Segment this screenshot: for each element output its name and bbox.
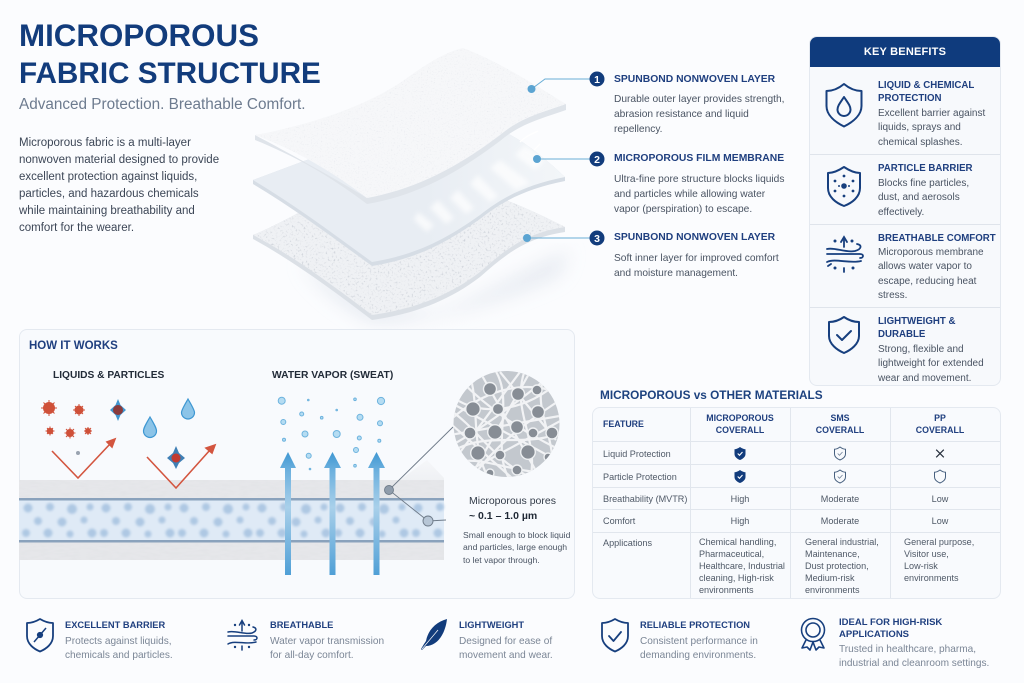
intro paragraph — [19, 137, 219, 234]
cross: PP liquid — [936, 450, 944, 457]
reflected arrow left — [52, 439, 115, 478]
microporous applications: Healthcare, Industrial — [699, 561, 785, 571]
how it works heading: HOW IT WORKS — [29, 340, 118, 352]
text: SMS — [830, 413, 850, 423]
number badge 1: 1 — [594, 74, 600, 86]
SMS applications: Medium-risk — [805, 573, 855, 583]
PP applications: General purpose, — [904, 537, 974, 547]
particles — [41, 399, 185, 469]
PP applications: Low-risk — [904, 561, 938, 571]
vapor arrows — [280, 452, 385, 575]
panel: key benefits — [809, 36, 1001, 386]
icon: breathable — [228, 620, 257, 650]
outline shield: SMS particle — [834, 470, 846, 483]
exploded fabric layers illustration — [253, 49, 604, 324]
microporous applications: environments — [699, 585, 754, 595]
microporous applications — [699, 537, 785, 595]
water vapor heading: WATER VAPOR (SWEAT) — [272, 370, 393, 381]
benefit: liquid and chemical protection: PROTECTION — [878, 92, 942, 104]
SMS applications: Maintenance, — [805, 549, 860, 559]
benefit: breathable comfort: stress. — [878, 290, 907, 301]
intro paragraph: particles, and hazardous chemicals — [19, 188, 199, 200]
benefit: liquid and chemical protection: Excellent barrier against — [878, 108, 985, 119]
pore size label — [469, 495, 556, 522]
bottom feature: ideal for high-risk applications: industrial and cleanroom settings. — [839, 658, 989, 669]
pore explanation: and particles, large enough — [463, 542, 567, 552]
layer 2 description: MICROPOROUS FILM MEMBRANE — [614, 153, 784, 164]
bottom feature: reliable protection: demanding environments. — [640, 650, 756, 661]
subtitle: Advanced Protection. Breathable Comfort. — [19, 96, 306, 113]
bottom feature: excellent barrier — [65, 620, 173, 661]
layer 3 description: Soft inner layer for improved comfort — [614, 253, 779, 264]
intro paragraph: comfort for the wearer. — [19, 222, 134, 234]
pore connector lines — [384, 427, 453, 526]
benefit: liquid and chemical protection: liquids, sprays and — [878, 122, 961, 133]
fabric cross section — [19, 460, 444, 560]
text: COVERALL — [716, 425, 764, 435]
bottom feature: ideal for high-risk applications: Trusted in healthcare, pharma, — [839, 644, 976, 655]
number badge 3: 3 — [594, 233, 600, 245]
benefit: lightweight and durable: wear and movement. — [878, 373, 971, 384]
SMS applications: Dust protection, — [805, 561, 869, 571]
benefit: liquid and chemical protection: LIQUID & CHEMICAL — [878, 80, 974, 90]
PP applications — [904, 537, 974, 583]
PP applications: Visitor use, — [904, 549, 949, 559]
bottom feature: lightweight: LIGHTWEIGHT — [459, 620, 524, 630]
layer 3 description: and moisture management. — [614, 268, 738, 279]
title: MICROPOROUS — [19, 18, 259, 53]
PP applications: environments — [904, 573, 959, 583]
liquid drops — [144, 399, 194, 438]
text: Breathability (MVTR) — [603, 494, 687, 504]
layer 3 description — [614, 232, 779, 279]
bottom feature: reliable protection: RELIABLE PROTECTION — [640, 620, 750, 630]
filled shield: particle — [734, 470, 746, 483]
comparison table — [592, 407, 1001, 599]
number badge 2: 2 — [594, 154, 600, 166]
layer 1 description: repellency. — [614, 124, 663, 135]
text: High — [731, 516, 749, 526]
breathability and comfort values: High — [731, 494, 749, 504]
icon: barrier shield — [27, 619, 53, 652]
outline shield: PP particle — [934, 470, 946, 483]
benefit: lightweight and durable: Strong, flexible and — [878, 344, 964, 355]
layer 3: spunbond inner — [253, 198, 565, 320]
pore explanation: Small enough to block liquid — [463, 530, 570, 540]
bottom feature: excellent barrier: chemicals and particles. — [65, 650, 173, 661]
benefit: breathable comfort: allows water vapor to — [878, 261, 972, 272]
intro paragraph: nonwoven material designed to provide — [19, 154, 219, 166]
bottom feature: lightweight — [459, 620, 553, 661]
row labels: Liquid Protection — [603, 449, 671, 459]
layer 1 description: Durable outer layer provides strength, — [614, 94, 784, 105]
layer 2 description — [614, 153, 784, 215]
SMS applications: General industrial, — [805, 537, 879, 547]
bottom feature: ideal for high-risk applications: APPLICATIONS — [839, 628, 909, 640]
benefit: particle barrier: PARTICLE BARRIER — [878, 162, 973, 174]
icon: check shield — [602, 619, 628, 652]
benefit: breathable comfort: BREATHABLE COMFORT — [878, 232, 996, 244]
layer shadows — [300, 250, 570, 322]
bottom feature: breathable — [270, 620, 384, 661]
layer 1: spunbond outer — [255, 48, 566, 204]
benefit: particle barrier — [878, 162, 973, 218]
text: Moderate — [821, 516, 859, 526]
text: PP — [934, 413, 946, 423]
text: Moderate — [821, 494, 859, 504]
layer 2 description: Ultra-fine pore structure blocks liquids — [614, 174, 784, 185]
benefit: breathable comfort — [878, 232, 996, 301]
SMS applications: environments — [805, 585, 860, 595]
microporous applications: cleaning, High-risk — [699, 573, 774, 583]
text: Particle Protection — [603, 472, 677, 482]
microporous applications: Chemical handling, — [699, 537, 776, 547]
intro paragraph: while maintaining breathability and — [19, 205, 195, 217]
panel: how it works — [19, 329, 575, 599]
reflected arrow right — [147, 445, 215, 488]
icon: feather — [421, 619, 447, 650]
text: Low — [932, 516, 948, 526]
number badge 2 — [590, 152, 604, 166]
bottom feature: lightweight: Designed for ease of — [459, 636, 552, 646]
benefit: liquid and chemical protection: chemical splashes. — [878, 137, 962, 148]
layer 1 description: SPUNBOND NONWOVEN LAYER — [614, 74, 775, 85]
text: MICROPOROUS — [706, 413, 774, 423]
benefit: lightweight and durable: lightweight for extended — [878, 358, 984, 369]
text: COVERALL — [916, 425, 964, 435]
bottom feature: ideal for high-risk applications — [839, 616, 989, 669]
liquids and particles heading: LIQUIDS & PARTICLES — [53, 370, 164, 381]
layer 2 description: vapor (perspiration) to escape. — [614, 204, 752, 215]
benefit: particle barrier: Blocks fine particles, — [878, 178, 969, 189]
bottom feature: breathable: for all-day comfort. — [270, 650, 354, 661]
how it works diagram — [19, 371, 560, 575]
key benefits header — [809, 36, 1001, 67]
key benefits header: KEY BENEFITS — [864, 46, 946, 58]
title — [19, 18, 321, 90]
bottom feature: breathable: Water vapor transmission — [270, 636, 384, 646]
layer 2 description: and particles while allowing water — [614, 189, 765, 200]
SMS applications — [805, 537, 879, 595]
intro paragraph: excellent protection against liquids, — [19, 171, 197, 183]
microporous applications: Pharmaceutical, — [699, 549, 764, 559]
vapor bubbles — [278, 397, 385, 470]
intro paragraph: Microporous fabric is a multi-layer — [19, 137, 191, 149]
text: Applications — [603, 538, 652, 548]
bottom feature: lightweight: movement and wear. — [459, 650, 553, 661]
dividers — [810, 154, 1000, 155]
pore explanation: to let vapor through. — [463, 555, 540, 565]
comparison heading: MICROPOROUS vs OTHER MATERIALS — [600, 388, 823, 402]
pore explanation — [463, 530, 570, 565]
number badge 3 — [590, 230, 604, 246]
bottom feature: excellent barrier: EXCELLENT BARRIER — [65, 620, 165, 630]
text: Low — [932, 494, 948, 504]
text: COVERALL — [816, 425, 864, 435]
benefit: particle barrier: dust, and aerosols — [878, 192, 960, 203]
benefit: lightweight and durable: LIGHTWEIGHT & — [878, 316, 956, 326]
title: FABRIC STRUCTURE — [19, 57, 321, 90]
layer 1 description — [614, 74, 784, 135]
layer callout lines — [523, 79, 590, 242]
layer 1 description: abrasion resistance and liquid — [614, 109, 749, 120]
pore size label: ~ 0.1 – 1.0 µm — [469, 510, 537, 522]
bottom feature: reliable protection — [640, 620, 758, 661]
filled shield: liquid — [734, 447, 746, 460]
number badge 1 — [590, 72, 604, 86]
bottom feature: reliable protection: Consistent performance in — [640, 636, 758, 646]
benefit: particle barrier: effectively. — [878, 207, 924, 218]
benefit: breathable comfort: Microporous membrane — [878, 247, 984, 258]
layer 3 description: SPUNBOND NONWOVEN LAYER — [614, 232, 775, 243]
icon: award ribbon — [802, 618, 824, 650]
bottom feature: ideal for high-risk applications: IDEAL FOR HIGH-RISK — [839, 616, 942, 628]
benefit: lightweight and durable — [878, 316, 984, 384]
benefit: lightweight and durable: DURABLE — [878, 328, 925, 340]
bottom feature: excellent barrier: Protects against liquids, — [65, 636, 172, 646]
pore size label: Microporous pores — [469, 495, 556, 507]
text: Comfort — [603, 516, 635, 526]
benefit: breathable comfort: escape, reducing heat — [878, 276, 976, 287]
table headers: FEATURE — [603, 419, 644, 429]
layer 2: microporous film — [253, 131, 565, 266]
outline shield: SMS liquid — [834, 447, 846, 460]
bottom feature: breathable: BREATHABLE — [270, 620, 333, 630]
microscope view of pores — [454, 371, 560, 477]
benefit: liquid and chemical protection — [878, 80, 986, 148]
